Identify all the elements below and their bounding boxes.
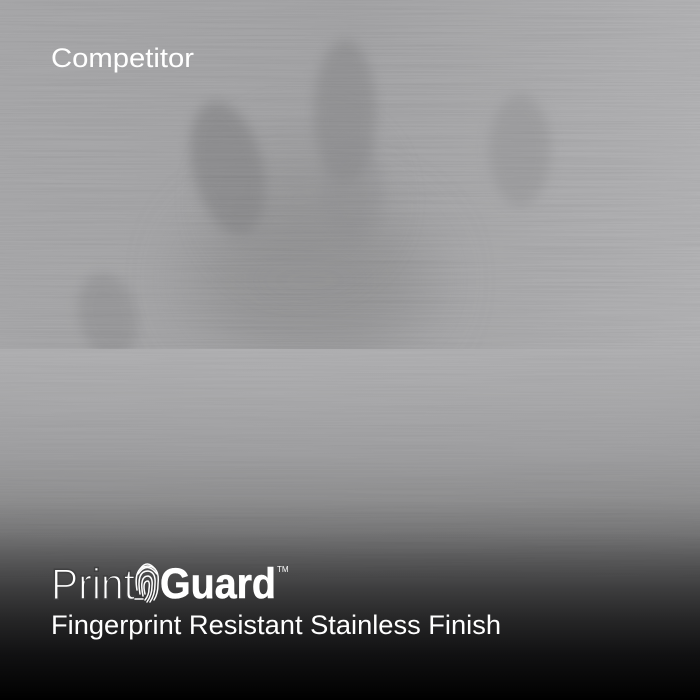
logo word: Guard: Guard (160, 560, 276, 608)
label: Competitor: Competitor (51, 43, 194, 73)
subtitle: Fingerprint Resistant Stainless Finish (51, 610, 501, 640)
hand smudge marks (69, 40, 551, 366)
panel: PrintGuard brushed steel fading to black (0, 349, 700, 700)
icon: fingerprint (135, 564, 158, 602)
trademark: TM (277, 565, 289, 574)
panel: competitor brushed steel with fingerprints (0, 0, 700, 366)
logo word: Print: Print (51, 560, 135, 609)
logo: PrintGuard (51, 560, 289, 609)
